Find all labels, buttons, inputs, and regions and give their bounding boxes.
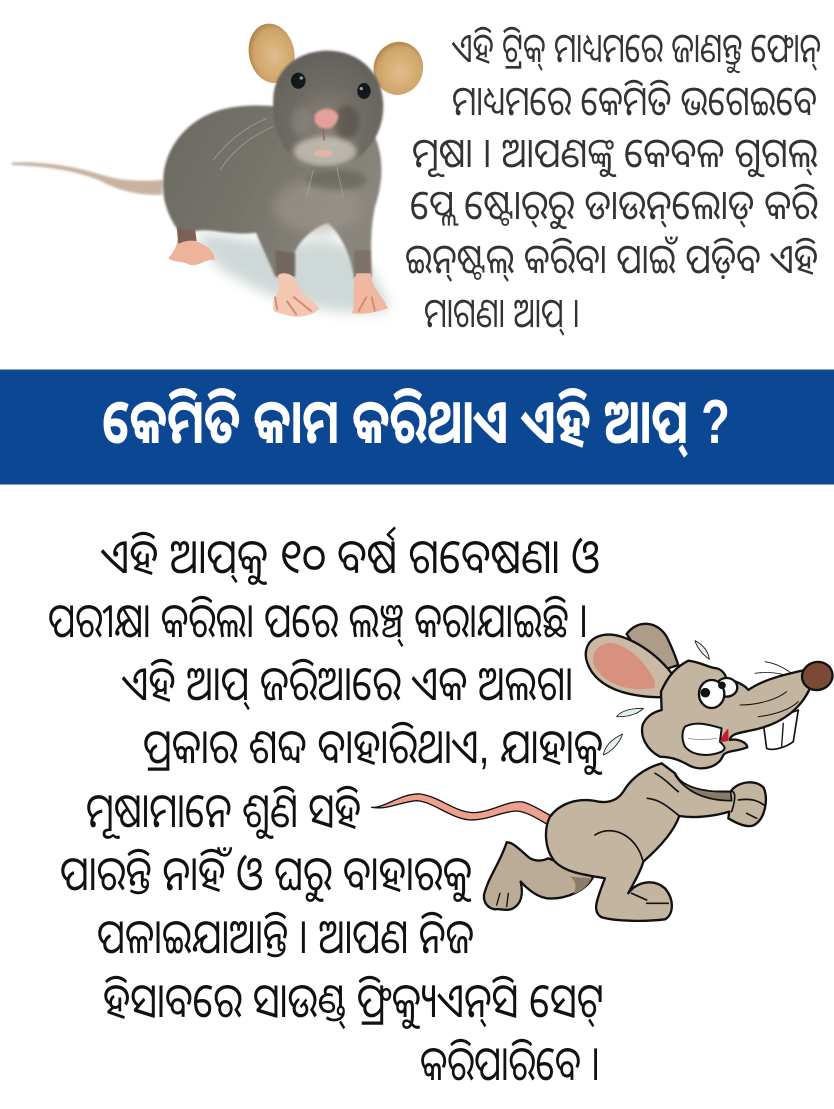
back ear: [627, 624, 678, 673]
photo: grey mouse: [12, 19, 429, 317]
back leg: [484, 842, 593, 910]
mouth: [314, 150, 333, 157]
tail: [372, 794, 553, 825]
text block: main paragraph: ହିସାବରେ ସାଉଣ୍ଡ୍ ଫ୍ରିକ୍ୟୁଏନ୍‌ସି ସେଟ୍: [103, 975, 604, 1030]
floor shadow: [197, 233, 390, 313]
arm shadow: [675, 775, 732, 801]
nose: [315, 109, 338, 129]
eyes: [716, 678, 737, 697]
head: [642, 661, 810, 768]
text block: main paragraph: ମୂଷାମାନେ ଶୁଣି ସହି: [86, 785, 361, 839]
eyes: [291, 73, 306, 89]
body and arm: [546, 763, 766, 921]
muzzle lines: [740, 692, 798, 717]
legs: [275, 250, 295, 277]
heading banner: [0, 370, 834, 484]
mouth: [682, 724, 725, 755]
text block: main paragraph: ପାରନ୍ତି ନାହିଁ ଓ ଘରୁ ବାହାରକୁ: [60, 847, 472, 902]
text block: main paragraph: କରିପାରିବେ ।: [420, 1038, 600, 1091]
whiskers: [755, 662, 792, 675]
tail: [12, 162, 163, 195]
text block: main paragraph: [48, 526, 604, 1091]
text block: main paragraph: ପରୀକ୍ଷା କରିଲା ପରେ ଲଞ୍ଚ୍ କରାଯାଇଛି ।: [48, 595, 588, 648]
back foot: [168, 230, 215, 265]
neck shadow: [307, 170, 367, 190]
text block: main paragraph: ଏହି ଆପ୍ ଜରିଆରେ ଏକ ଅଲଗା: [121, 658, 573, 711]
text block: main paragraph: ପ୍ରକାର ଶବ୍ଦ ବାହାରିଥାଏ, ଯାହାକୁ: [143, 721, 603, 775]
illustration: cartoon mouse running: [372, 624, 834, 921]
head: [273, 51, 383, 170]
muzzle: [293, 137, 357, 167]
front ear: [586, 635, 672, 697]
front foot left: [273, 273, 320, 317]
nose: [799, 659, 834, 693]
text block: intro paragraph: [405, 25, 821, 336]
body lines: [595, 773, 764, 903]
left ear: [243, 19, 300, 87]
text block: intro paragraph: ମାଗଣା ଆପ୍ ।: [424, 290, 580, 336]
text block: main paragraph: ଏହି ଆପ୍‌କୁ ୧୦ ବର୍ଷ ଗବେଷଣା ଓ: [100, 526, 600, 585]
whisker hairs: [213, 118, 343, 197]
text block: main paragraph: ପଳାଇଯାଆନ୍ତି । ଆପଣ ନିଜ: [97, 911, 474, 964]
right ear: [368, 36, 429, 100]
sweat drops: [603, 641, 709, 755]
front foot right: [352, 273, 388, 314]
chest: [273, 180, 360, 233]
teeth: [763, 710, 798, 749]
body: [163, 51, 383, 278]
